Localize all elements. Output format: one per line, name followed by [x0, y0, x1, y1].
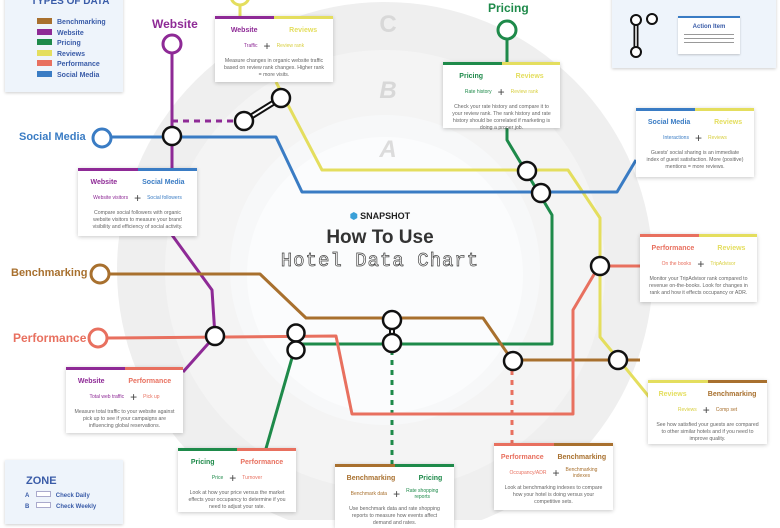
card: performance + benchmarking: indexes: [573, 473, 590, 479]
card: pricing + performance: [178, 448, 296, 512]
card: benchmarking + pricing: Use benchmark data and rate shopping reports to measure how events affect demand and rates.: [349, 506, 440, 526]
legend: types of data: Social Media: [57, 72, 99, 78]
card: website + reviews: Traffic: [244, 43, 258, 49]
card: reviews + benchmarking: Benchmarking: [708, 391, 756, 398]
legend: types of data: [5, 0, 123, 92]
card: website + social: Social followers: [147, 195, 182, 201]
card: performance + reviews: Reviews: [717, 245, 745, 252]
card: website + reviews: Website: [231, 27, 258, 34]
card: website + social: Website: [90, 179, 117, 186]
card: website + social: [78, 168, 197, 236]
legend: types of data: Pricing: [57, 40, 81, 47]
card: website + performance: Measure total traffic to your website against pick up to see if your campaigns are influencing global reservations.: [75, 409, 174, 429]
card: performance + reviews: Performance: [652, 245, 694, 252]
card: pricing + reviews: Reviews: [516, 73, 544, 80]
card: social + reviews: Reviews: [708, 135, 727, 141]
card: benchmarking + pricing: Rate shopping: [406, 488, 438, 494]
title block: How To Use: [326, 227, 434, 248]
legend: types of data: Performance: [57, 61, 100, 68]
card: social + reviews: [636, 108, 754, 177]
card: performance + reviews: Monitor your TripAdvisor rank compared to revenue on-the-books. Look for changes in rank and how it effects occupancy or ADR.: [649, 276, 748, 296]
card: benchmarking + pricing: reports: [414, 494, 430, 500]
card: performance + reviews: +: [697, 257, 704, 271]
card: pricing + reviews: Check your rate history and compare it to your review rank. The rank history and rate history should be correlated if marketing is doing a proper job.: [452, 104, 551, 131]
card: performance + benchmarking: [494, 443, 613, 510]
card: performance + benchmarking: Benchmarking: [566, 467, 597, 473]
card: performance + benchmarking: Benchmarking: [557, 454, 606, 461]
card: reviews + benchmarking: [648, 380, 767, 444]
card: performance + reviews: On the books: [662, 261, 691, 267]
card: website + performance: Website: [78, 378, 105, 385]
card: reviews + benchmarking: +: [703, 403, 710, 417]
card: pricing + performance: +: [229, 471, 236, 485]
legend: types of data: Benchmarking: [57, 19, 106, 26]
card: pricing + performance: Turnover: [242, 475, 262, 481]
card: social + reviews: Interactions: [663, 135, 689, 141]
card: social + reviews: +: [695, 131, 702, 145]
card: reviews + benchmarking: Comp set: [716, 407, 737, 413]
card: social + reviews: Guests' social sharing is an immediate index of guest satisfaction. More (positive) mentions = more reviews.: [647, 150, 743, 170]
title block: ⬢ SNAPSHOT: [350, 211, 410, 221]
card: pricing + reviews: +: [498, 85, 505, 99]
card: performance + benchmarking: +: [552, 466, 560, 480]
text: Benchmarking: [11, 267, 87, 279]
legend: zone: B Check Weekly: [25, 504, 96, 510]
background zones and metro lines: A: [378, 136, 397, 163]
card: pricing + performance: Price: [212, 475, 223, 481]
card: website + performance: [66, 367, 183, 433]
card: website + performance: +: [130, 390, 137, 404]
legend: action item: [612, 0, 776, 68]
card: benchmarking + pricing: +: [393, 487, 400, 501]
text: Performance: [13, 331, 86, 345]
card: website + performance: Pick up: [143, 394, 160, 400]
card: benchmarking + pricing: Benchmarking: [347, 475, 395, 482]
card: benchmarking + pricing: Benchmark data: [351, 491, 387, 497]
card: website + reviews: +: [264, 39, 271, 53]
card: reviews + benchmarking: Reviews: [659, 391, 687, 398]
end circles: [89, 0, 516, 347]
card: reviews + benchmarking: Reviews: [678, 407, 697, 413]
card: benchmarking + pricing: [335, 464, 454, 528]
title block: Hotel Data Chart: [281, 250, 479, 272]
card: pricing + reviews: [443, 62, 560, 128]
text: Pricing: [488, 1, 529, 15]
card: website + social: +: [134, 191, 141, 205]
background zones and metro lines: B: [379, 77, 397, 104]
legend: zone: ZONE: [26, 475, 57, 487]
card: pricing + reviews: Pricing: [459, 73, 483, 80]
card: pricing + reviews: Review rank: [511, 89, 538, 95]
card: performance + reviews: [640, 234, 757, 302]
card: website + reviews: Reviews: [289, 27, 317, 34]
card: social + reviews: Social Media: [648, 119, 690, 126]
card: performance + reviews: TripAdvisor: [710, 261, 735, 267]
interchange nodes: [163, 89, 627, 370]
card: website + performance: Performance: [128, 378, 171, 385]
card: website + social: Compare social followers with organic website visitors to measure your brand visibility and efficiency of social activity.: [93, 210, 182, 230]
background zones and metro lines: C: [379, 11, 397, 38]
card: benchmarking + pricing: Pricing: [419, 475, 442, 482]
connectors: [244, 98, 392, 350]
legend: zone: [5, 460, 123, 524]
card: website + reviews: Measure changes in organic website traffic based on review rank changes. Higher rank = more visits.: [224, 58, 324, 78]
legend: types of data: Reviews: [57, 50, 85, 58]
card: pricing + performance: Pricing: [191, 459, 215, 466]
card: pricing + performance: Look at how your price versus the market effects your occupancy to determine if you need to adjust your rate.: [188, 490, 286, 510]
legend: types of data: Website: [57, 30, 84, 36]
card: website + social: Social Media: [142, 179, 185, 186]
line labels: Website: [152, 17, 198, 31]
card: website + reviews: [215, 16, 333, 82]
legend: action item: Action Item: [693, 24, 725, 30]
card: performance + benchmarking: Occupancy/ADR: [510, 470, 546, 476]
title block: [281, 211, 479, 272]
card: pricing + reviews: Rate history: [465, 89, 492, 95]
card: website + social: Website visitors: [93, 195, 128, 201]
card: performance + benchmarking: Look at benchmarking indexes to compare how your hotel is doing versus your competitive sets.: [505, 485, 602, 505]
legend: zone: A Check Daily: [25, 493, 90, 499]
card: website + reviews: Review rank: [277, 43, 304, 49]
card: pricing + performance: Performance: [240, 459, 283, 466]
card: performance + benchmarking: Performance: [501, 454, 544, 461]
card: social + reviews: Reviews: [714, 119, 742, 126]
card: website + performance: Total web traffic: [89, 394, 124, 400]
card: reviews + benchmarking: See how satisfied your guests are compared to other similar hotels and if you need to improve quality.: [656, 422, 759, 442]
text: Social Media: [19, 131, 86, 143]
